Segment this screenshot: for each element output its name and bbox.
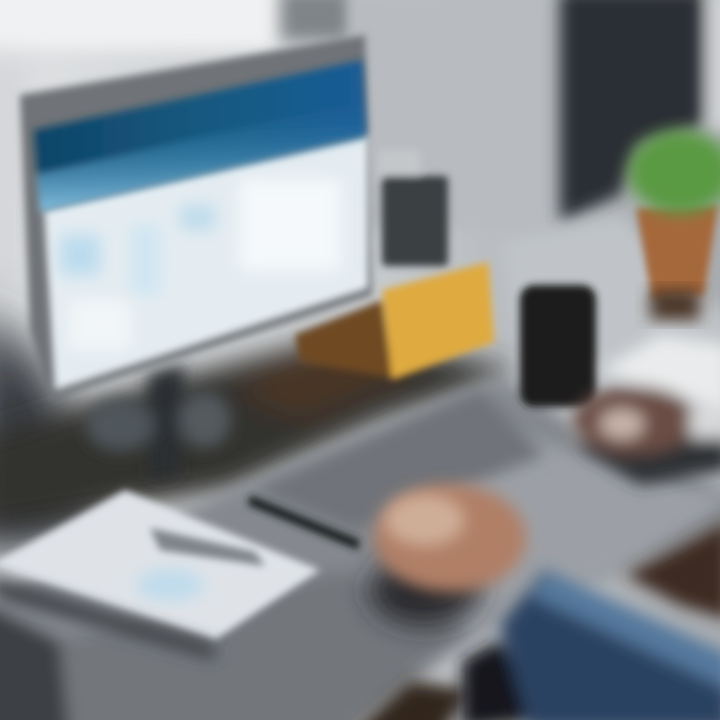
dark speaker xyxy=(378,150,448,266)
monitor screen body xyxy=(44,135,368,390)
plant pot xyxy=(628,130,720,320)
wood desk corner xyxy=(345,520,720,720)
paper document xyxy=(0,490,320,660)
blue tint on paper xyxy=(136,569,204,601)
keyboard xyxy=(255,390,545,530)
dark pen on paper xyxy=(150,528,265,566)
plant leaves xyxy=(628,130,720,214)
yellow box xyxy=(295,262,494,380)
dark window column xyxy=(560,0,720,222)
desk surface: dark back xyxy=(0,335,520,530)
denim sleeve xyxy=(462,570,720,720)
desk surface: grey front xyxy=(0,215,720,720)
monitor frame xyxy=(20,35,372,400)
left hand xyxy=(370,484,526,625)
black cup xyxy=(520,285,596,407)
screen header band xyxy=(34,60,366,212)
monitor stand xyxy=(86,365,231,480)
keyboard edge xyxy=(248,495,360,550)
monitor xyxy=(20,35,372,480)
screen widgets xyxy=(60,180,340,350)
right hand and papers xyxy=(573,335,720,485)
dark left shadow xyxy=(0,300,110,560)
